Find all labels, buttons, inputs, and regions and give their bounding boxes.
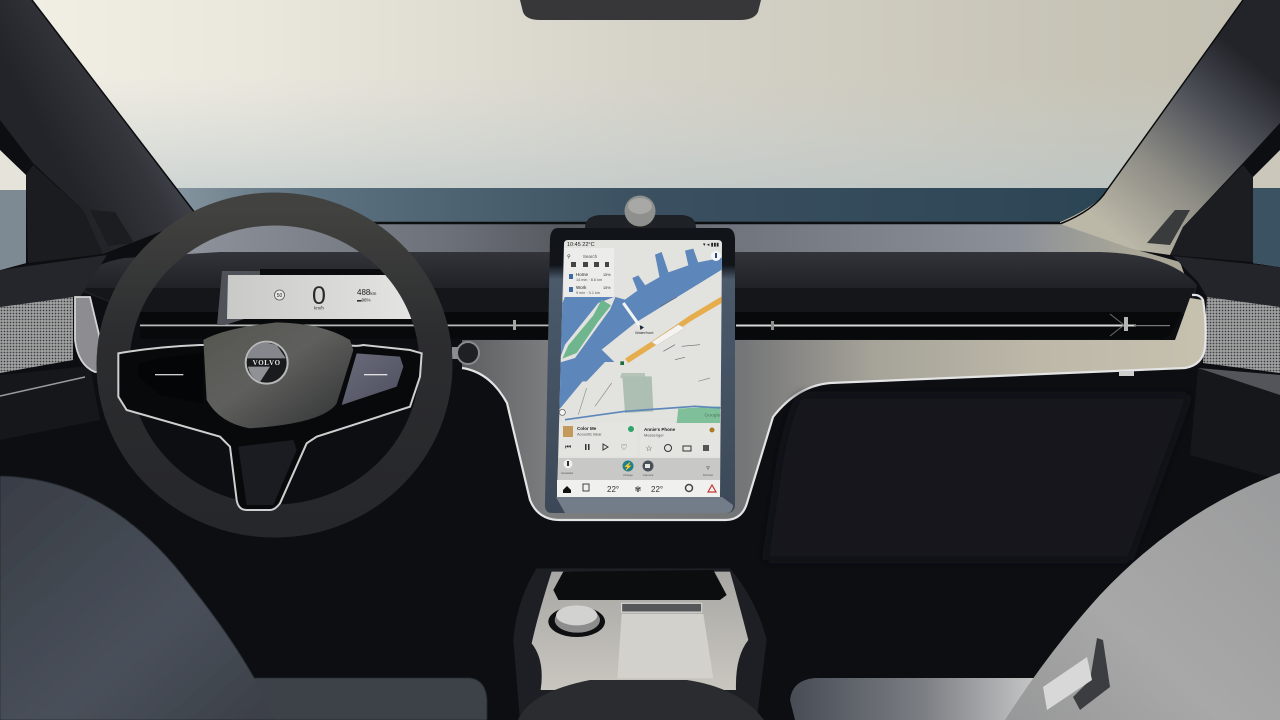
right grey pad [342,353,403,405]
centre brushed plate [617,614,713,678]
status bar [567,242,719,248]
instrument cluster display: km/h [314,306,324,310]
instrument cluster display: ▬96% [357,298,371,302]
air vent strip [140,312,1182,339]
voice button [711,251,721,261]
music player card: ⏮ [565,444,571,451]
navigation search card [564,248,614,297]
lower dashboard panel [765,395,1190,560]
lower spoke gloss [238,440,297,505]
quick action row: Defrost [703,473,713,477]
speed readout: 0 [312,282,326,310]
rear-view mirror [520,0,761,20]
steering column dial [452,342,479,364]
phone card [640,423,720,456]
drive selector dial [548,605,605,637]
right door speaker [1203,297,1280,373]
wheel hub [203,322,353,428]
console side wings [513,568,767,720]
phone card: Annie's Phone [644,427,676,432]
quick action row: ▿ [706,465,710,472]
navigation search card: 9 min · 3.1 km [576,291,600,295]
quick action row [558,458,720,480]
left gloss pad [138,353,203,403]
saved destination: home: Home [576,272,589,277]
range readout: 488km [357,288,377,297]
left door panel [0,255,108,440]
navigation search card: 15% [603,273,611,277]
camera dome and speaker base [585,196,696,228]
quick action row: ⚡ [623,461,633,471]
spokes and hub [118,322,422,510]
dashboard metal panel with chrome trim [462,295,1206,520]
phone card: ☆ [645,444,653,453]
navigation search card: 15% [603,286,611,290]
map [558,240,722,493]
navigation search card: Search [583,254,598,259]
storage tray [553,570,727,600]
brand emblem [246,342,288,384]
climate and home bar: 22° [607,485,619,494]
right A-pillar with vent [1040,0,1280,262]
music player card [559,423,637,456]
quick action row: Assistant [561,471,573,475]
climate and home bar [557,480,720,497]
left A-pillar with vent [0,0,195,263]
quick action row: Camera [643,473,654,477]
right seat back [1005,473,1280,720]
dashboard hood and vent band [78,252,1197,314]
saved destination: work: Work [576,285,587,290]
status bar: ▾ ◂ ▮▮▮ [703,242,719,248]
music player card: Acoustic Bear [577,432,602,436]
armrest [518,680,764,720]
instrument cluster display [217,269,413,325]
brand emblem: VOLVO [253,359,281,367]
dashboard top surface [130,223,1190,290]
left door speaker [0,297,73,373]
screen bezel [545,228,735,513]
left seat back and cushion [0,476,487,720]
climate and home bar: ✾ [635,485,642,494]
steering wheel [113,209,436,521]
centre console [513,568,767,720]
climate and home bar: 22° [651,485,663,494]
windshield with sky and sea [32,0,1243,224]
left side window [0,150,26,270]
seat handle [1043,638,1110,710]
speed limit sign [274,290,284,300]
centre touchscreen [545,228,735,513]
status bar: 10:45 22°C [567,242,595,248]
quick action row: Charge [623,473,633,477]
right door panel [1173,256,1280,480]
map upper half: water, park, route: Waterfront [635,330,654,335]
left chrome-trimmed panel [75,297,108,372]
right seat cushion [790,678,1035,720]
speed limit sign: 50 [277,293,282,299]
brushed metal top [532,572,748,690]
selector slot [622,603,702,612]
wheel rim [113,209,436,521]
music player card: Color Me [577,426,597,431]
navigation search card: 14 min · 8.6 km [576,278,602,282]
map upper half: water, park, route [558,249,723,381]
chrome-edged spoke frame [118,345,422,510]
navigation search card: ⚲ [567,254,571,260]
music player card: ♡ [620,443,628,452]
right side window [1253,150,1280,267]
map lower half: water, park, river [555,376,722,423]
phone card: Messenger [644,432,664,438]
map lower half: water, park, river: Google [704,412,721,418]
